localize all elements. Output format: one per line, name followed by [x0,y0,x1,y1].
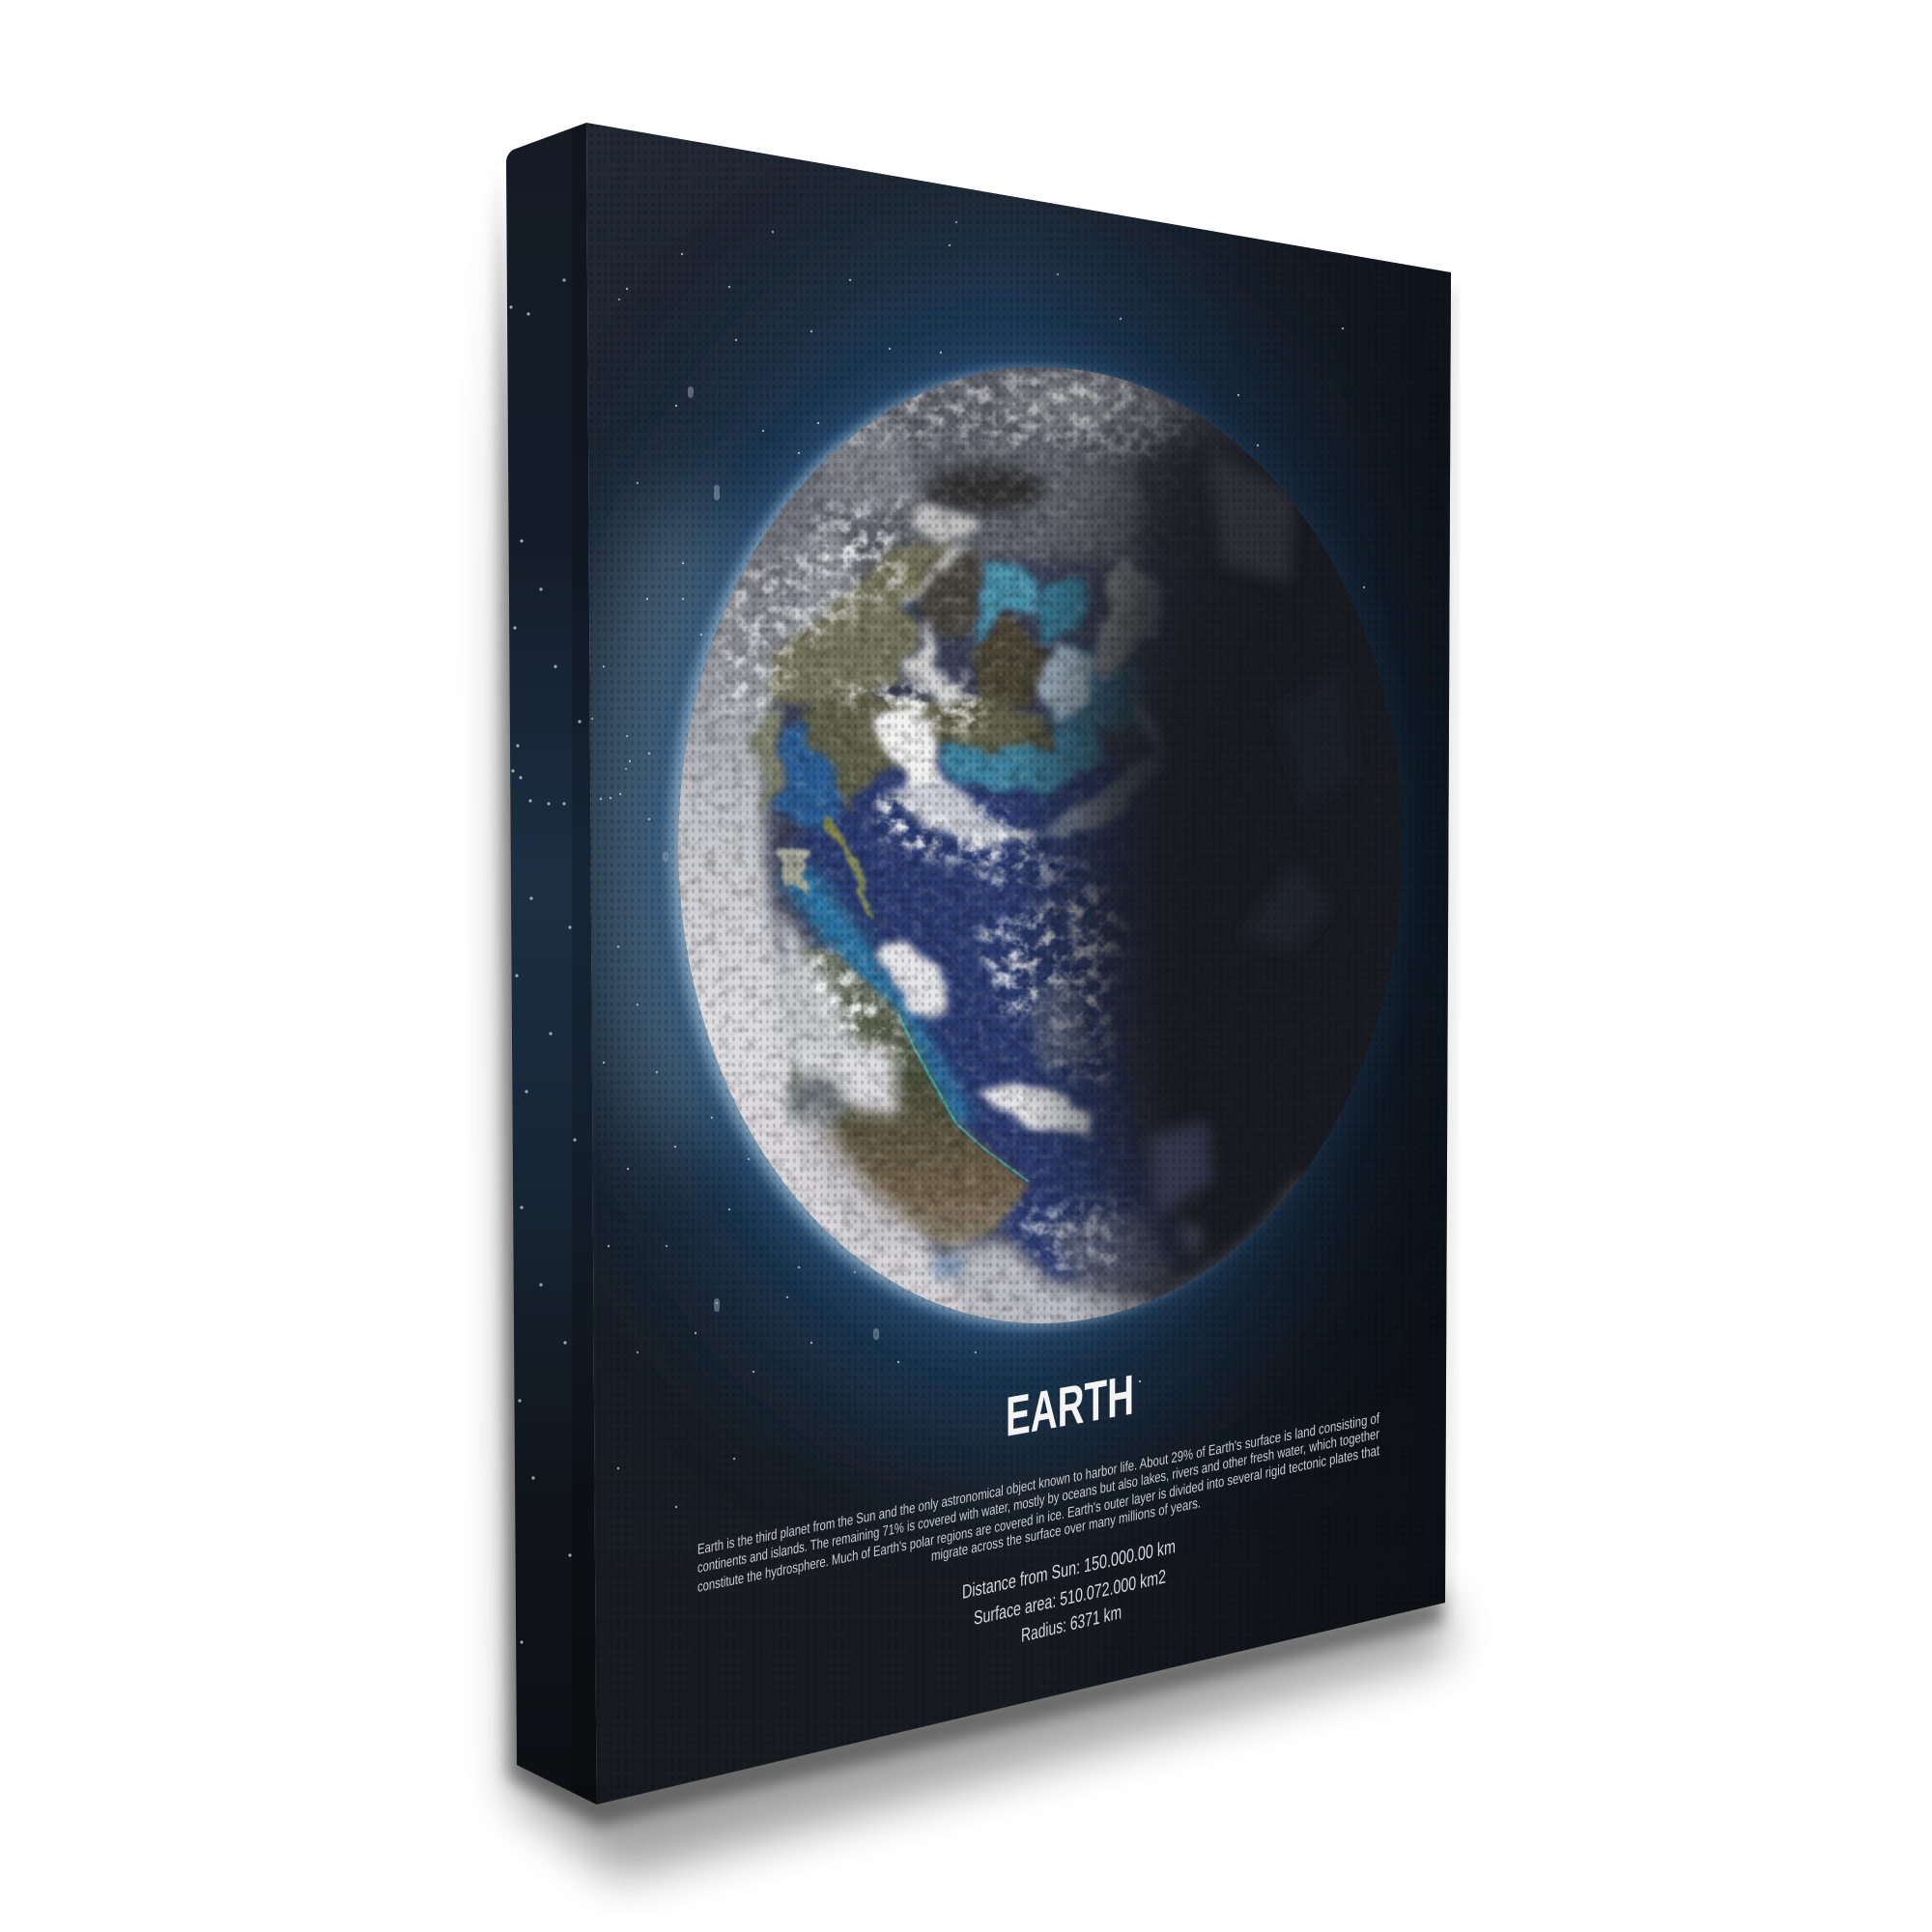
description paragraph: migrate across the surface over many millions of years. [931,1494,1201,1565]
planet earth [652,357,1420,1350]
canvas front panel [580,116,1468,1816]
title: EARTH [1006,1363,1134,1449]
background glow [589,192,1451,1662]
lit hemisphere base [678,551,1196,1313]
canvas side edge [506,123,597,1804]
land: central america and islands [778,814,881,921]
land: north america [758,541,1048,824]
star field [592,222,1372,1507]
ground clouds and haze [773,905,1174,1336]
planet facts: Surface area: 510.072.000 km2 [974,1566,1166,1630]
drop shadow [498,164,1456,1879]
dark northern land [786,381,1190,638]
planet facts [962,1536,1176,1647]
surface texture [667,357,1420,1343]
canvas weave texture [580,116,1468,1816]
ocean [775,563,1193,1285]
night side faint details [1150,454,1357,1307]
solid white clouds [874,502,1164,1137]
planet facts: Distance from Sun: 150.000.00 km [962,1536,1176,1604]
description paragraph: continents and islands. The remaining 71% is covered with water, mostly by oceans but also lakes, rivers and other fresh water, which together [697,1426,1379,1577]
land: south america [792,947,1029,1249]
description paragraph: Earth is the third planet from the Sun and the only astronomical object known to harbor life. About 29% of Earth's surface is land consisting of [697,1410,1380,1558]
north polar cloud cap [742,367,1256,609]
mottled clouds [715,367,1208,1275]
infographic: Earth stretched canvas [477,123,1472,1901]
planet facts: Radius: 6371 km [1021,1602,1122,1647]
description paragraph: constitute the hydrosphere. Much of Earth's polar regions are covered in ice. Earth's outer layer is divided into several rigid tectonic plates that [697,1442,1380,1596]
left bright limb [678,468,1034,1323]
night side [667,357,1420,1343]
